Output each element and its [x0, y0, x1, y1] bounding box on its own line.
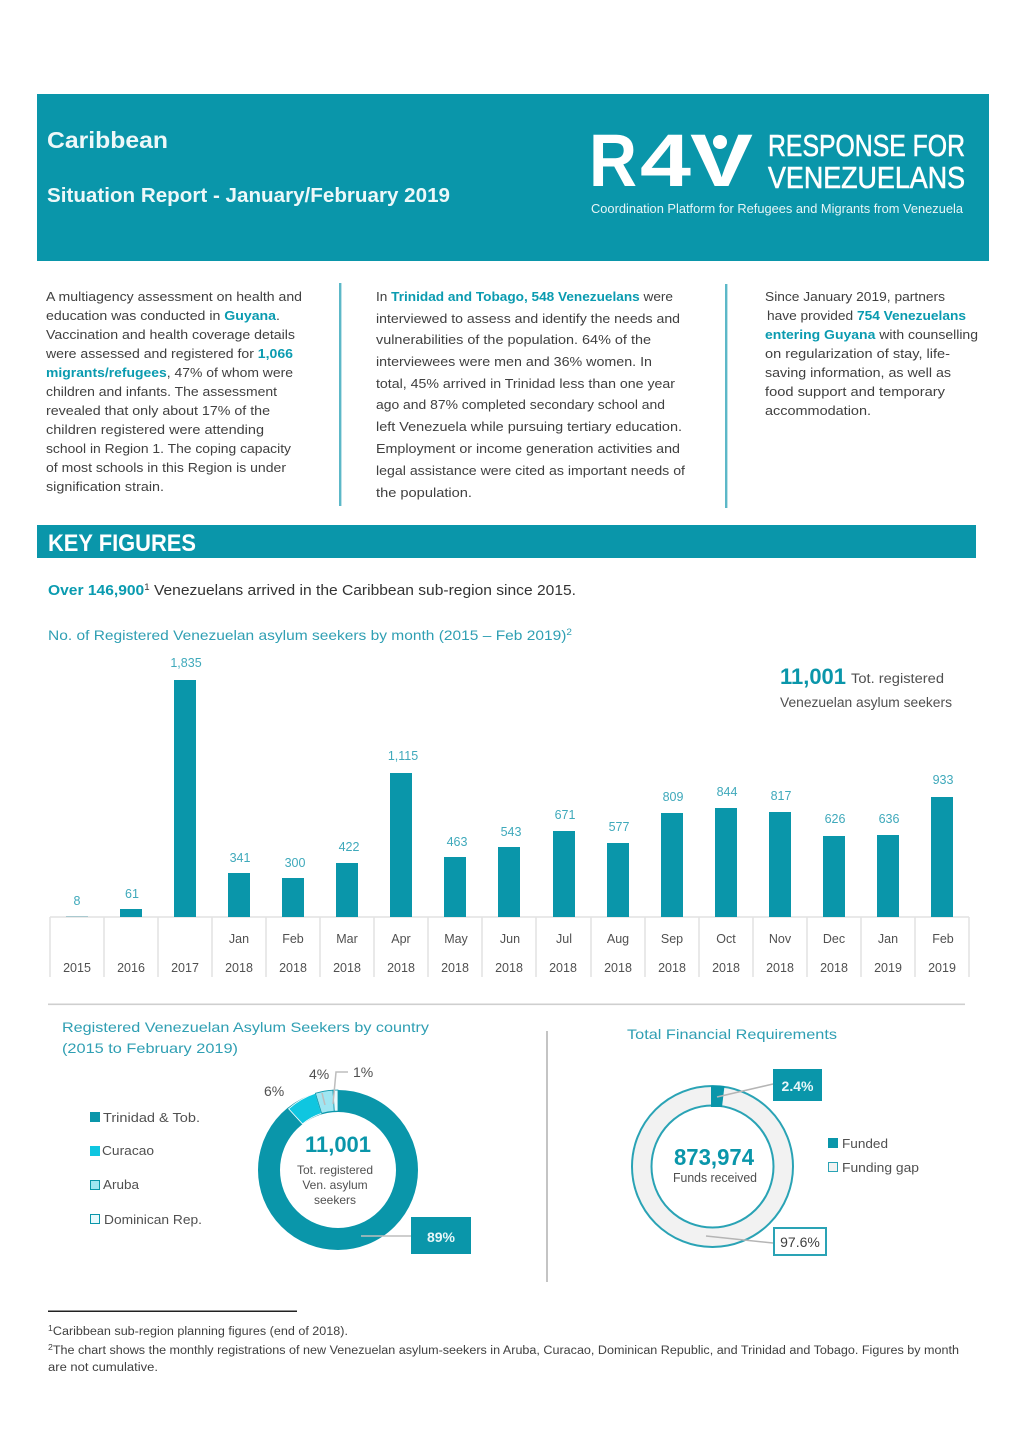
bar values: 1,115 [388, 749, 418, 763]
centre total: 11,001 [305, 1132, 371, 1157]
bar values: 933 [933, 773, 953, 787]
callout 97.6% [774, 1228, 826, 1255]
text block: Trinidad and Tobago interviews: interviewed to assess and identify the needs and [376, 312, 680, 326]
bar values: 422 [339, 840, 359, 854]
total callout: Tot. registered [851, 671, 944, 686]
key figure statement: Venezuelans arrived in the Caribbean sub-region since 2015. [150, 583, 576, 599]
axis years: 2016 [117, 961, 145, 975]
donut chart: funding [632, 1084, 793, 1247]
header banner [37, 94, 989, 261]
axis years: 2018 [549, 961, 577, 975]
callout 2.4%: 2.4% [782, 1078, 814, 1094]
text block: services in Guyana: accommodation. [765, 404, 871, 418]
footnotes: 1 [48, 1324, 53, 1333]
axis years: 2019 [928, 961, 956, 975]
footnotes: 2 [48, 1343, 53, 1352]
text block: Trinidad and Tobago interviews: the population. [376, 486, 472, 500]
centre caption [297, 1163, 373, 1207]
footnotes: Caribbean sub-region planning figures (end of 2018). [53, 1326, 348, 1338]
panel heading [62, 1019, 429, 1056]
text block: Guyana assessment: migrants/refugees , 47% of whom were [46, 366, 293, 380]
legend [828, 1136, 919, 1175]
text block: services in Guyana: saving information, as well as [765, 366, 951, 380]
chart title: 2 [566, 627, 572, 637]
logo wordmark [591, 128, 965, 216]
legend [90, 1110, 202, 1227]
donut chart: country shares [264, 1064, 471, 1254]
total callout: 11,001 [780, 664, 846, 689]
bar values: 577 [609, 820, 629, 834]
text block: Trinidad and Tobago interviews: ago and 87% completed secondary school and [376, 398, 665, 412]
funded wedge [711, 1086, 724, 1107]
axis months: Jan [878, 932, 898, 946]
text block: Trinidad and Tobago interviews: interviewees were men and 36% women. In [376, 355, 652, 369]
key figure statement: 1 [144, 582, 150, 592]
axis years [63, 961, 956, 975]
axis months: Nov [769, 932, 792, 946]
footnotes [48, 1324, 959, 1374]
bar values: 543 [501, 825, 521, 839]
text block: services in Guyana: have provided 754 Venezuelans [767, 309, 966, 323]
text block: Guyana assessment: revealed that only about 17% of the [46, 404, 270, 418]
subtitle: situation report: Situation Report - January/February 2019 [47, 185, 450, 207]
text block: services in Guyana: entering Guyana with counselling [765, 328, 978, 342]
axis months: Sep [661, 932, 683, 946]
axis years: 2018 [820, 961, 848, 975]
logo: R4V: V [690, 119, 753, 202]
Curacao 6% [289, 1093, 322, 1124]
axis years: 2018 [279, 961, 307, 975]
Dominican Republic 1% [333, 1090, 338, 1111]
legend: Dominican Rep. [104, 1212, 202, 1227]
text block: Trinidad and Tobago interviews: Employment or income generation activities and [376, 442, 680, 456]
percent labels: 1% [353, 1064, 373, 1080]
chart title: No. of Registered Venezuelan asylum seekers by month (2015 – Feb 2019) [48, 627, 516, 643]
axis months: Oct [716, 932, 736, 946]
footnotes: are not cumulative. [48, 1362, 158, 1374]
text block: Guyana assessment: signification strain. [46, 480, 164, 494]
text block: Trinidad and Tobago interviews: In Trinidad and Tobago, 548 Venezuelans were [376, 290, 673, 304]
total callout [780, 664, 952, 710]
text block: Trinidad and Tobago interviews: vulnerabilities of the population. 64% of the [376, 333, 651, 347]
text block: Guyana assessment [45, 290, 302, 494]
legend: Curacao [102, 1143, 154, 1158]
axis years: 2017 [171, 961, 199, 975]
callout 89% [411, 1217, 471, 1254]
logo: R4V: R [589, 119, 637, 202]
text block: Guyana assessment: education was conducted in Guyana . [46, 309, 280, 323]
callout 2.4% [773, 1069, 822, 1101]
axis years: 2018 [604, 961, 632, 975]
heading: key figures: KEY FIGURES [48, 530, 196, 557]
axis years: 2018 [712, 961, 740, 975]
percent labels: 6% [264, 1083, 284, 1099]
axis years: 2018 [766, 961, 794, 975]
axis years: 2018 [333, 961, 361, 975]
axis months [229, 932, 954, 946]
text block: Guyana assessment: were assessed and registered for 1,066 [45, 347, 293, 361]
axis months: Aug [607, 932, 629, 946]
legend: Funding gap [842, 1160, 919, 1175]
legend: Trinidad & Tob. [103, 1110, 200, 1125]
text block: Trinidad and Tobago interviews: left Venezuela while pursuing tertiary education. [376, 420, 682, 434]
callout 97.6%: 97.6% [780, 1234, 820, 1250]
panel heading: (2015 to February 2019) [62, 1040, 238, 1056]
centre caption: seekers [314, 1193, 356, 1207]
axis months: Feb [282, 932, 304, 946]
text block: Guyana assessment: A multiagency assessment on health and [46, 290, 302, 304]
text block: Trinidad and Tobago interviews [376, 290, 686, 500]
bar values: 1,835 [170, 656, 202, 670]
text block: Guyana assessment: school in Region 1. The coping capacity [46, 442, 292, 456]
centre amount: 873,974 [674, 1144, 754, 1170]
axis years: 2018 [225, 961, 253, 975]
axis months: May [444, 932, 469, 946]
text block: Trinidad and Tobago interviews: total, 45% arrived in Trinidad less than one year [376, 377, 675, 391]
centre caption: Ven. asylum [302, 1178, 368, 1192]
centre caption: Tot. registered [297, 1163, 373, 1177]
logo wordmark: Coordination Platform for Refugees and Migrants from Venezuela [591, 201, 964, 216]
axis months: Jan [229, 932, 249, 946]
legend: Aruba [103, 1177, 140, 1192]
logo: R4V [589, 119, 753, 202]
legend: Funded [842, 1136, 888, 1151]
axis months: Apr [391, 932, 411, 946]
Aruba 4% [315, 1090, 334, 1113]
text block: services in Guyana: on regularization of stay, life- [765, 347, 950, 361]
axis years: 2018 [495, 961, 523, 975]
text block: Guyana assessment: Vaccination and health coverage details [46, 328, 295, 342]
bar values: 463 [447, 835, 467, 849]
text block: Trinidad and Tobago interviews: legal assistance were cited as important needs of [376, 464, 686, 478]
axis years: 2015 [63, 961, 91, 975]
panel heading: Registered Venezuelan Asylum Seekers by country [62, 1019, 429, 1035]
text block: services in Guyana: Since January 2019, partners [765, 290, 945, 304]
axis months: Jul [556, 932, 572, 946]
text block: services in Guyana: food support and temporary [765, 385, 946, 399]
text block: services in Guyana [765, 290, 978, 418]
leader lines [322, 1072, 411, 1236]
bar values [74, 656, 953, 908]
centre caption: Funds received [673, 1171, 757, 1185]
axis grid [50, 917, 969, 977]
bar values: 8 [74, 894, 81, 908]
axis months: Feb [932, 932, 954, 946]
logo wordmark: VENEZUELANS [768, 160, 965, 195]
axis years: 2018 [387, 961, 415, 975]
percent labels: 4% [309, 1066, 329, 1082]
bar values: 809 [663, 790, 683, 804]
text block: Guyana assessment: of most schools in this Region is under [46, 461, 286, 475]
panel: total financial requirements [627, 1026, 919, 1255]
bar values: 341 [230, 851, 250, 865]
axis months: Dec [823, 932, 845, 946]
bar values: 61 [125, 887, 139, 901]
axis months: Jun [500, 932, 520, 946]
heading: key figures [37, 525, 976, 558]
bar values: 300 [285, 856, 305, 870]
key figure statement: Over 146,900 [48, 583, 144, 599]
bar values: 636 [879, 812, 899, 826]
axis years: 2018 [441, 961, 469, 975]
title: Caribbean: Caribbean [47, 127, 168, 153]
footnotes: The chart shows the monthly registrations of new Venezuelan asylum-seekers in Aruba, Curacao, Dominican Republic, and Trinidad and Tobago. Figures by month [53, 1345, 959, 1357]
axis years: 2018 [658, 961, 686, 975]
logo wordmark: RESPONSE FOR [768, 128, 965, 163]
bars [66, 680, 953, 917]
panel: asylum seekers by country [62, 1019, 471, 1254]
axis years: 2019 [874, 961, 902, 975]
text block: Guyana assessment: children registered were attending [46, 423, 264, 437]
callout 89%: 89% [427, 1229, 456, 1245]
axis months: Mar [336, 932, 358, 946]
leader lines [706, 1084, 773, 1243]
panel heading: Total Financial Requirements [627, 1026, 837, 1042]
bar values: 844 [717, 785, 737, 799]
bar values: 671 [555, 808, 575, 822]
total callout: Venezuelan asylum seekers [780, 695, 952, 710]
bar values: 626 [825, 812, 845, 826]
logo: R4V: 4 [640, 119, 691, 202]
bar chart: registrations by month [50, 656, 969, 977]
percent labels [264, 1064, 373, 1099]
bar values: 817 [771, 789, 791, 803]
text block: Guyana assessment: children and infants. The assessment [46, 385, 278, 399]
